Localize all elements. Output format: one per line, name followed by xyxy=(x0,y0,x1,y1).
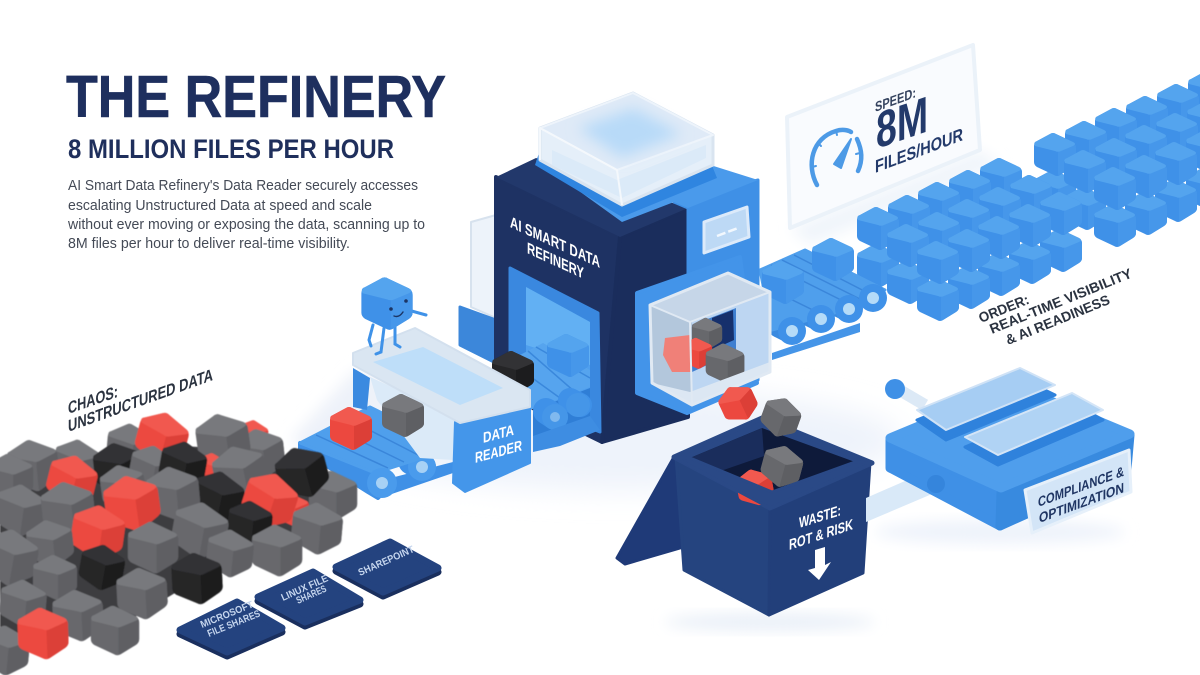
glass top housing xyxy=(540,93,713,205)
glass bar 1 xyxy=(917,378,1055,440)
source tile: SharePoint xyxy=(336,542,438,596)
panel: speed glass display xyxy=(787,45,1000,245)
source tile: SharePoint: SHAREPOINT xyxy=(357,544,416,579)
falling gray cube xyxy=(756,393,805,442)
speed label: SPEED: xyxy=(875,85,916,116)
chaos label: UNSTRUCTURED DATA xyxy=(68,364,213,436)
mascot cube character xyxy=(361,277,426,354)
speed value: 8M xyxy=(876,85,928,161)
control screen xyxy=(704,207,749,253)
navy tower left face xyxy=(496,177,620,442)
rear blue block xyxy=(460,307,500,365)
waste label: ROT & RISK xyxy=(789,517,853,554)
data reader label: READER xyxy=(475,438,522,467)
navy tower top xyxy=(496,158,688,237)
refinery machine xyxy=(460,93,770,452)
machine name: REFINERY xyxy=(527,239,584,283)
source tile: Microsoft File Shares xyxy=(180,600,282,656)
compliance label plate xyxy=(1025,450,1131,533)
source tile: Microsoft File Shares: FILE SHARES xyxy=(206,609,262,640)
back glass panel xyxy=(471,215,496,318)
chaos label xyxy=(68,364,213,436)
data reader scanner xyxy=(330,328,530,492)
blue top xyxy=(536,160,758,222)
exit frame xyxy=(637,257,757,413)
description text block: without ever moving or exposing the data, scanning up to xyxy=(67,216,425,233)
waste label xyxy=(789,502,853,554)
bin rim xyxy=(674,418,872,508)
chaos label: CHAOS: xyxy=(68,381,118,418)
black cube entering xyxy=(492,351,534,394)
source tile: Linux File Shares: SHARES xyxy=(295,584,329,607)
source tile: Linux File Shares xyxy=(258,572,360,626)
entrance door xyxy=(510,268,600,432)
bin lid xyxy=(617,457,690,564)
conveyor: output belt xyxy=(760,238,887,360)
glass top xyxy=(353,328,530,423)
description text block: 8M files per hour to deliver real-time visibility. xyxy=(68,235,350,252)
glass bar 2 xyxy=(965,403,1103,465)
data reader label: DATA xyxy=(483,422,514,447)
bin right face xyxy=(769,462,870,615)
source tile: Linux File Shares: LINUX FILE xyxy=(280,573,330,604)
order label: & AI READINESS xyxy=(1003,291,1112,348)
title: THE REFINERY xyxy=(66,64,446,130)
machine name: AI SMART DATA xyxy=(510,213,600,272)
glass exit chamber xyxy=(650,273,770,405)
falling red cube xyxy=(714,379,762,427)
front rim xyxy=(674,457,872,508)
compliance label: OPTIMIZATION xyxy=(1039,480,1124,527)
blue cube stack: near xyxy=(857,158,1082,321)
waste bin xyxy=(617,393,872,615)
inner conveyor xyxy=(520,343,600,452)
order label: REAL-TIME VISIBILITY xyxy=(987,265,1135,337)
machine name xyxy=(510,213,600,283)
data reader label xyxy=(475,422,522,467)
speed unit: FILES/HOUR xyxy=(875,124,963,177)
description text block: escalating Unstructured Data at speed and scale xyxy=(68,197,372,214)
compliance block xyxy=(890,368,1131,533)
navy tower right face xyxy=(602,208,688,442)
order label: ORDER: xyxy=(976,291,1031,326)
compliance label: COMPLIANCE & xyxy=(1038,464,1124,511)
cube in door xyxy=(547,334,589,377)
icon: speedometer gauge xyxy=(812,130,861,185)
rear pipe xyxy=(885,379,925,405)
subtitle: 8 MILLION FILES PER HOUR xyxy=(68,134,394,164)
description text block: AI Smart Data Refinery's Data Reader securely accesses xyxy=(68,177,418,194)
waste label: WASTE: xyxy=(799,502,841,532)
blue cube stack: far xyxy=(1034,71,1200,247)
bin left face xyxy=(676,456,770,615)
pipe from bin to compliance xyxy=(866,470,946,522)
bin interior xyxy=(690,428,855,492)
pile of unstructured data cubes xyxy=(0,407,357,675)
blue side panel xyxy=(674,180,758,413)
source tile: Microsoft File Shares: MICROSOFT xyxy=(199,600,255,631)
conveyor: input belt xyxy=(300,407,453,498)
description text block xyxy=(67,177,425,252)
icon: down arrow xyxy=(808,547,831,580)
